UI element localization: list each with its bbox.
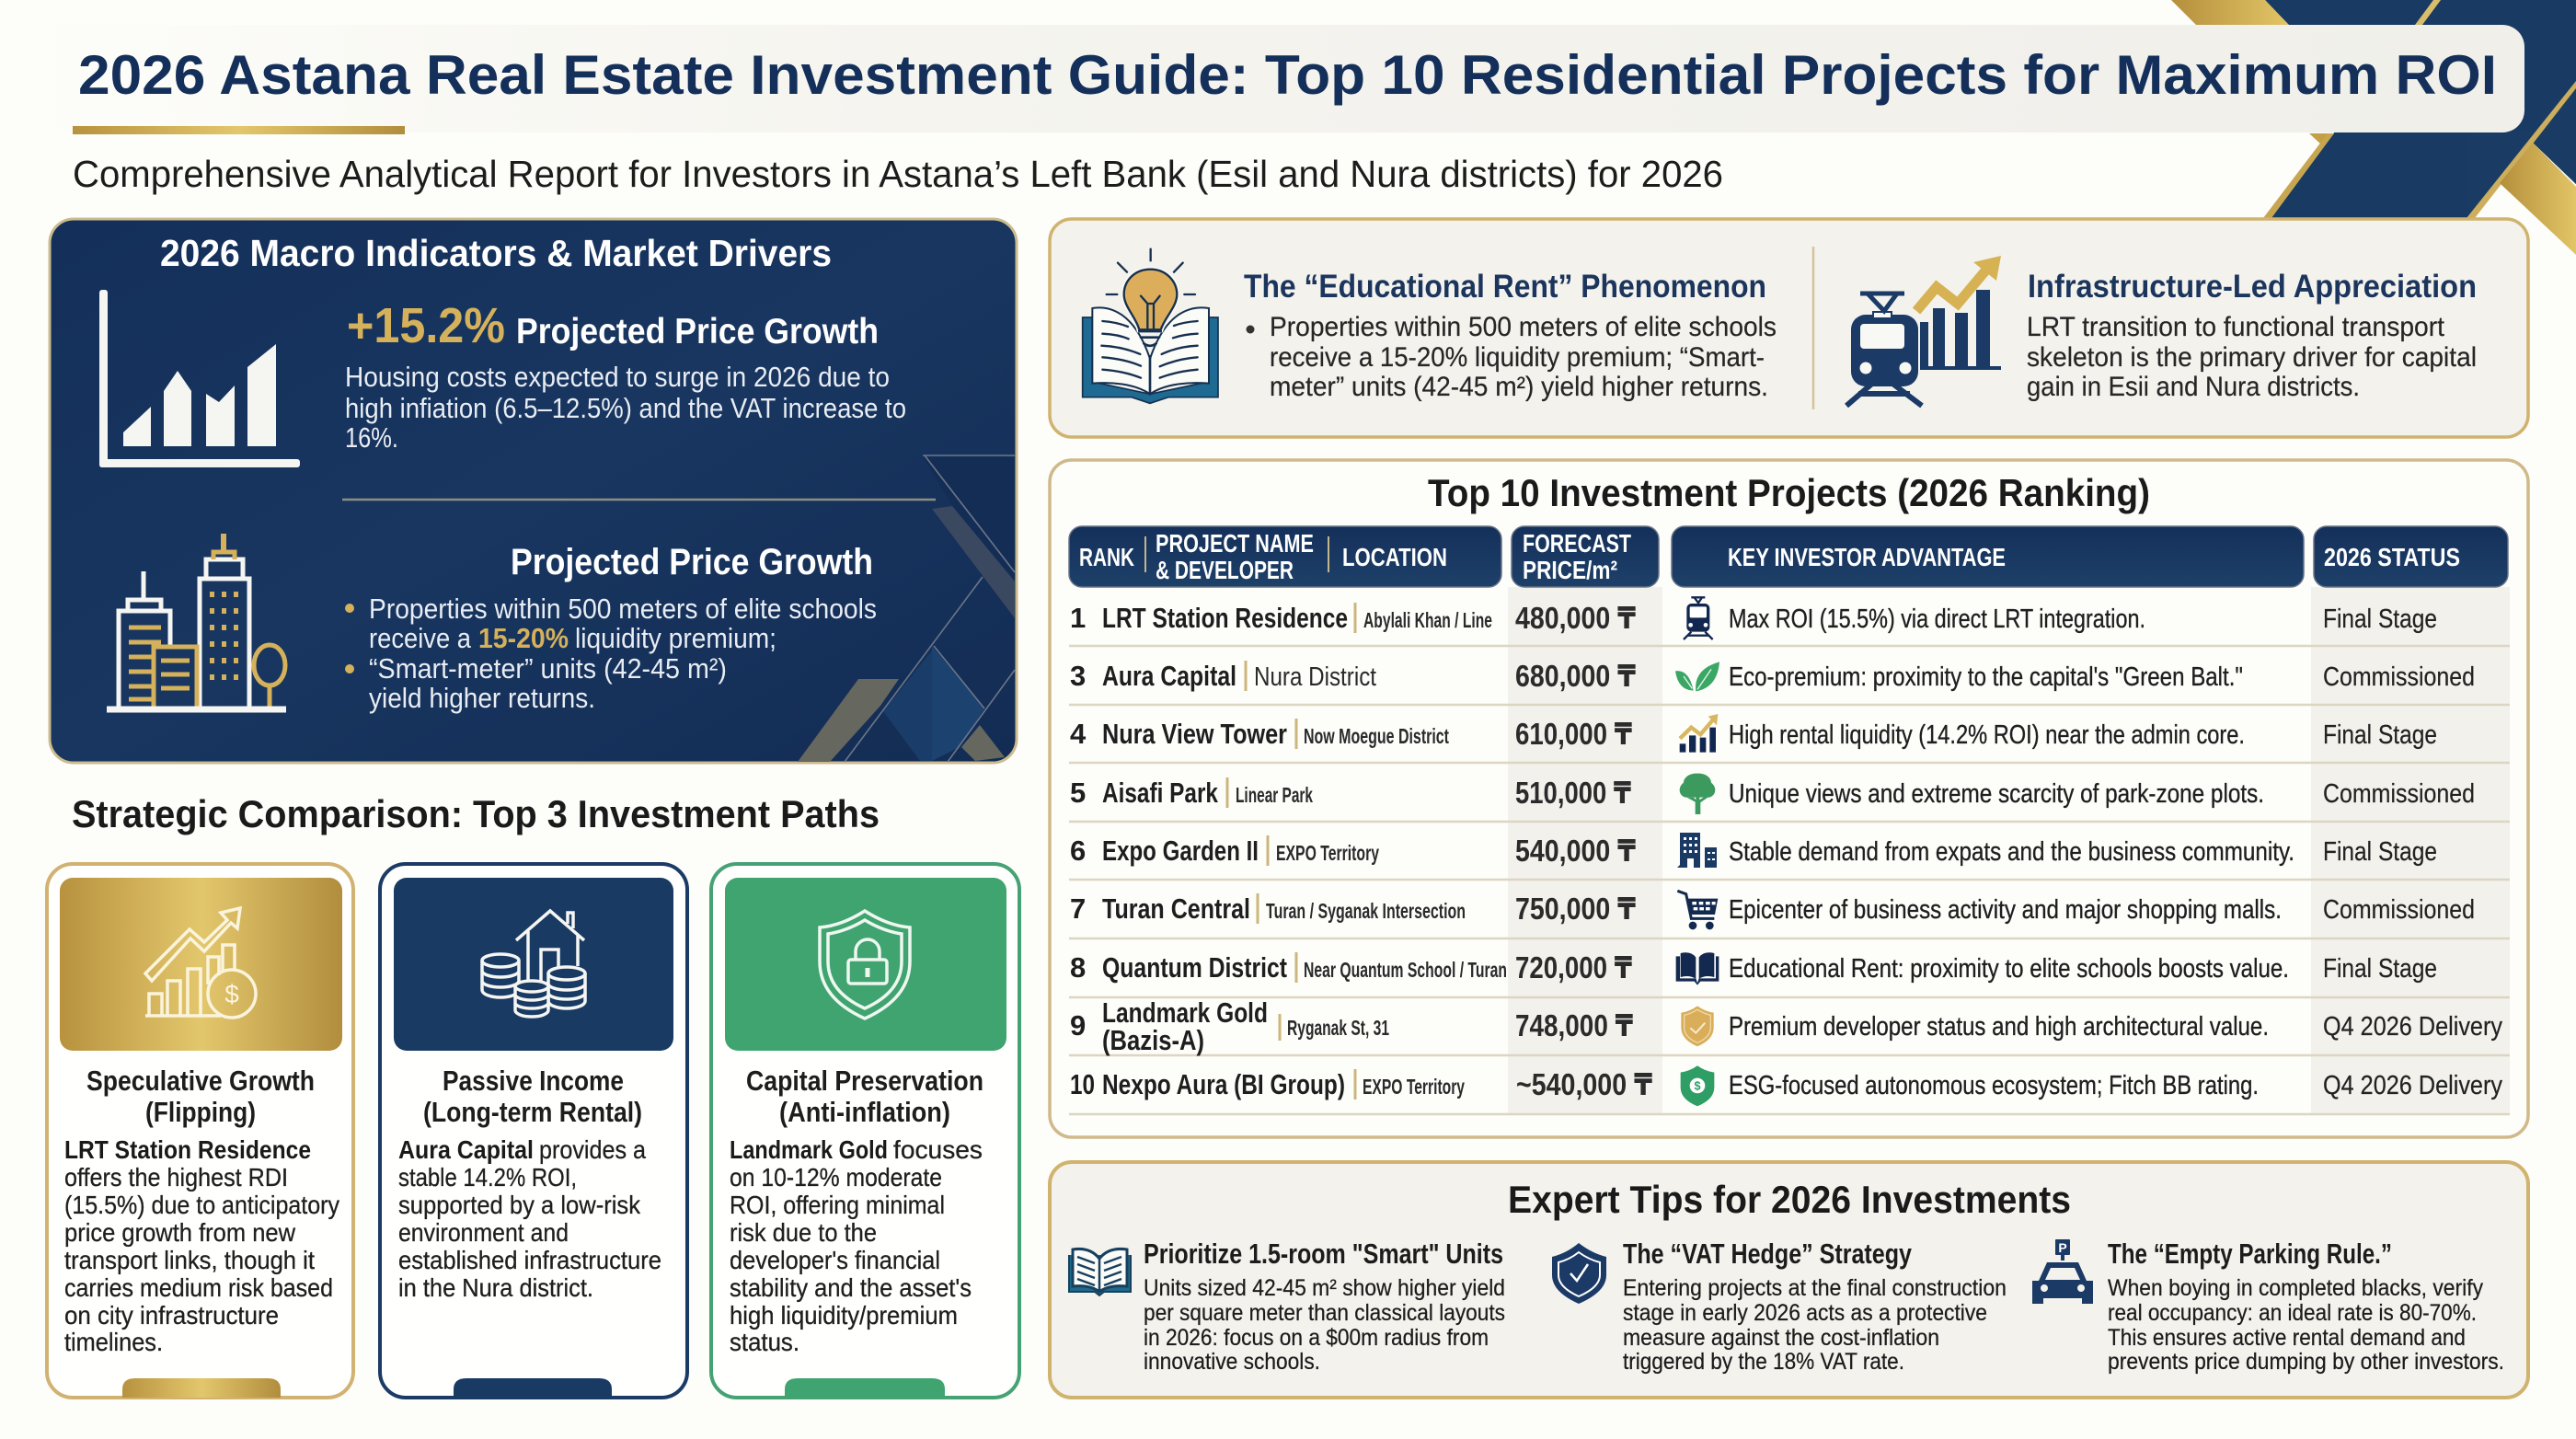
row: Quantum District: Final Stage	[2323, 954, 2437, 984]
row: Turan Central: 750,000 ₸	[1515, 892, 1636, 926]
row: Landmark Gold: 748,000 ₸	[1515, 1008, 1633, 1042]
row: Landmark Gold: (Bazis-A)	[1102, 1024, 1204, 1056]
row: Landmark Gold: Ryganak St, 31	[1287, 1016, 1389, 1040]
row: Turan Central: 7	[1070, 892, 1086, 925]
text: housing costs	[345, 361, 906, 454]
icon: rising chart	[1680, 714, 1718, 753]
bullets: schools and smart-meter units: 15-20%	[478, 622, 569, 654]
bullets: schools and smart-meter units: yield higher returns.	[369, 682, 595, 714]
card title: (Anti-inflation)	[779, 1096, 950, 1128]
row: Nura View Tower: High rental liquidity (14.2% ROI) near the admin core.	[1729, 720, 2245, 750]
text: housing costs: 16%.	[345, 421, 398, 454]
tip: parking rule: This ensures active rental demand and	[2108, 1325, 2466, 1351]
card text: on 10-12% moderate	[730, 1163, 942, 1191]
card tab	[785, 1378, 945, 1398]
row: Aura Capital: Eco-premium: proximity to the capital's "Green Balt."	[1729, 662, 2243, 692]
row: Turan Central: Epicenter of business activity and major shopping malls.	[1729, 895, 2282, 925]
card text: on city infrastructure	[64, 1301, 279, 1330]
table header: LOCATION	[1342, 543, 1447, 571]
icon: growth chart and coin	[145, 908, 256, 1018]
text: infrastructure	[2027, 312, 2477, 402]
row: Expo Garden II: 540,000 ₸	[1515, 834, 1636, 868]
tip: VAT hedge: The “VAT Hedge” Strategy	[1623, 1238, 1913, 1270]
table header: KEY INVESTOR ADVANTAGE	[1728, 543, 2006, 571]
icon: house and coins	[482, 911, 585, 1017]
card title: (Flipping)	[145, 1096, 256, 1128]
tip: VAT hedge: Entering projects at the final construction	[1623, 1275, 2007, 1301]
row: Aura Capital: Nura District	[1254, 662, 1376, 692]
bullets: schools and smart-meter units: “Smart-meter” units (42-45 m²)	[369, 652, 727, 685]
row: Quantum District: 720,000 ₸	[1515, 950, 1632, 984]
tip: parking rule: real occupancy: an ideal rate is 80-70%.	[2108, 1300, 2477, 1326]
card tab	[454, 1378, 612, 1398]
heading: educational rent: The “Educational Rent” Phenomenon	[1244, 269, 1766, 305]
bullets: schools and smart-meter units: Properties within 500 meters of elite schools	[369, 593, 877, 625]
table header: & DEVELOPER	[1156, 556, 1294, 584]
card text	[398, 1135, 661, 1302]
bullets: schools and smart-meter units: receive a	[369, 622, 472, 654]
card text: established infrastructure	[398, 1246, 661, 1274]
row: Aisafi Park: Unique views and extreme scarcity of park-zone plots.	[1729, 779, 2264, 809]
row: Aisafi Park: 5	[1070, 777, 1086, 809]
row: Expo Garden II: Final Stage	[2323, 837, 2437, 867]
row: Aura Capital	[1070, 659, 2475, 693]
icon: book	[1069, 1249, 1131, 1295]
text: infrastructure: skeleton is the primary driver for capital	[2027, 342, 2477, 373]
icon: parking car	[2032, 1239, 2093, 1304]
row: Aura Capital: Aura Capital	[1102, 660, 1236, 692]
row: Nexpo Aura: ESG-focused autonomous ecosystem; Fitch BB rating.	[1729, 1071, 2259, 1100]
row: LRT Station Residence: Max ROI (15.5%) via direct LRT integration.	[1729, 604, 2145, 634]
heading: infrastructure: Infrastructure-Led Appreciation	[2028, 269, 2477, 305]
row: Expo Garden II	[1070, 833, 2437, 868]
card text: developer's financial	[730, 1246, 940, 1274]
panel heading: 2026 Macro Indicators & Market Drivers	[160, 232, 832, 274]
card: speculative growth	[47, 864, 353, 1398]
row: Landmark Gold: 9	[1070, 1009, 1086, 1042]
row: Landmark Gold: Landmark Gold	[1102, 996, 1268, 1029]
icon: open book	[1676, 952, 1719, 985]
row: Nura View Tower: 4	[1070, 718, 1087, 750]
row: Nexpo Aura	[1070, 1065, 2502, 1106]
row: Turan Central: Commissioned	[2323, 895, 2475, 925]
row: Turan Central: Turan Central	[1102, 892, 1250, 925]
row: Nura View Tower: Now Moegue District	[1304, 724, 1449, 748]
card title	[423, 1065, 642, 1128]
text: infrastructure: LRT transition to functional transport	[2027, 312, 2445, 342]
table header: FORECAST	[1523, 529, 1631, 558]
card text: focuses	[893, 1135, 983, 1164]
row: Turan Central	[1070, 891, 2475, 929]
table header: RANK	[1079, 543, 1134, 571]
card text: timelines.	[64, 1328, 163, 1356]
icon: book with light bulb	[1083, 249, 1218, 403]
row: Nexpo Aura: 10	[1070, 1068, 1095, 1100]
row: Expo Garden II: EXPO Territory	[1276, 841, 1379, 865]
row: Quantum District: Near Quantum School / Turan	[1304, 958, 1507, 982]
table header: PRICE/m²	[1523, 556, 1617, 584]
row: Aura Capital: Commissioned	[2323, 662, 2475, 692]
card text: supported by a low-risk	[398, 1191, 641, 1219]
row: Nexpo Aura: Nexpo Aura (BI Group)	[1102, 1068, 1345, 1100]
card text: stable 14.2% ROI,	[398, 1163, 577, 1191]
icon: green shield: $	[1694, 1080, 1701, 1093]
tip: VAT hedge	[1623, 1238, 2007, 1375]
row: LRT Station Residence: Final Stage	[2323, 604, 2437, 634]
card text: stability and the asset's	[730, 1273, 972, 1302]
title panel	[28, 25, 2524, 132]
card text: transport links, though it	[64, 1246, 315, 1274]
card text: LRT Station Residence	[64, 1135, 311, 1164]
table header: PROJECT NAME	[1156, 529, 1314, 558]
row: Aura Capital: 3	[1070, 660, 1086, 692]
table header: 2026 STATUS	[2324, 543, 2460, 571]
row: LRT Station Residence: Abylali Khan / Line	[1363, 608, 1492, 632]
tip: smart units: in 2026: focus on a $00m radius from	[1144, 1325, 1489, 1351]
table row lines	[1069, 646, 2510, 1114]
card text: (15.5%) due to anticipatory	[64, 1191, 339, 1219]
row: Turan Central: Turan / Syganak Intersection	[1266, 899, 1466, 923]
row: Aisafi Park: Commissioned	[2323, 779, 2475, 809]
card title: (Long-term Rental)	[423, 1096, 642, 1128]
card: capital preservation	[711, 864, 1019, 1398]
row: Landmark Gold: Q4 2026 Delivery	[2323, 1012, 2502, 1042]
text: educational rent: meter” units (42-45 m²) yield higher returns.	[1270, 372, 1768, 402]
tips heading: Expert Tips for 2026 Investments	[1508, 1178, 2071, 1221]
row: Nexpo Aura: ~540,000 ₸	[1516, 1067, 1652, 1101]
icon: growth chart and coin: $	[224, 980, 239, 1008]
row: LRT Station Residence	[1070, 597, 2437, 639]
table header	[1069, 526, 2508, 587]
row: Expo Garden II: Expo Garden II	[1102, 835, 1259, 867]
row: Nura View Tower: Nura View Tower	[1102, 718, 1287, 750]
title: 2026 Astana Real Estate Investment Guide: Top 10 Residential Projects for Maximum ROI	[78, 44, 2497, 106]
row: LRT Station Residence: LRT Station Residence	[1102, 602, 1348, 634]
row: Aisafi Park	[1070, 774, 2475, 814]
row: Aisafi Park: Linear Park	[1236, 783, 1313, 807]
card text: high liquidity/premium	[730, 1301, 958, 1330]
card text: environment and	[398, 1218, 569, 1247]
row: Aisafi Park: 510,000 ₸	[1515, 776, 1631, 810]
tip: parking rule: prevents price dumping by other investors.	[2108, 1349, 2504, 1375]
icon: shield and lock	[820, 911, 910, 1019]
tip: smart units: Prioritize 1.5-room "Smart" Units	[1144, 1238, 1503, 1270]
table title: Top 10 Investment Projects (2026 Ranking)	[1428, 471, 2150, 514]
card text: Aura Capital	[398, 1135, 534, 1164]
heading: projected price growth: Projected Price Growth	[511, 542, 873, 582]
card text: Landmark Gold	[730, 1135, 888, 1164]
text: educational rent: receive a 15-20% liquidity premium; “Smart-	[1270, 342, 1765, 373]
bullets: schools and smart-meter units: liquidity premium;	[575, 622, 776, 654]
panel: expert tips	[1050, 1162, 2528, 1398]
card tab	[122, 1378, 281, 1398]
card: passive income	[380, 864, 687, 1398]
card text: offers the highest RDI	[64, 1163, 288, 1191]
icon: bar chart	[99, 290, 300, 467]
tip: smart units: Units sized 42-45 m² show higher yield	[1144, 1275, 1505, 1301]
card title: Speculative Growth	[86, 1065, 315, 1097]
card text: carries medium risk based	[64, 1273, 333, 1302]
tip: smart units: per square meter than classical layouts	[1144, 1300, 1505, 1326]
tip: smart units: innovative schools.	[1144, 1349, 1320, 1375]
card text: risk due to the	[730, 1218, 877, 1247]
panel: macro indicators	[50, 219, 1017, 763]
row: Nura View Tower: Final Stage	[2323, 720, 2437, 750]
panel: top 10 table	[1050, 460, 2528, 1137]
text: housing costs: Housing costs expected to surge in 2026 due to	[345, 361, 890, 393]
row: Expo Garden II: 6	[1070, 835, 1086, 867]
icon: train	[1684, 597, 1713, 639]
row: Nura View Tower: 610,000 ₸	[1515, 717, 1632, 751]
tip: parking rule: The “Empty Parking Rule.”	[2108, 1238, 2392, 1270]
row: Aisafi Park: Aisafi Park	[1102, 777, 1219, 809]
row: Nexpo Aura: Q4 2026 Delivery	[2323, 1071, 2502, 1100]
tip: VAT hedge: measure against the cost-inflation	[1623, 1325, 1939, 1351]
stat: price growth: +15.2%	[347, 298, 505, 353]
card text	[730, 1135, 983, 1356]
icon: green shield	[1681, 1065, 1714, 1106]
icon: parking car: P	[2058, 1240, 2067, 1255]
row: Nexpo Aura: EXPO Territory	[1363, 1075, 1465, 1099]
icon: shield	[1552, 1243, 1606, 1304]
table column shading	[1508, 587, 2510, 1114]
icon: gold shield	[1681, 1006, 1714, 1046]
card text	[64, 1135, 339, 1356]
panel: insights	[1050, 219, 2528, 437]
tip: parking rule	[2108, 1238, 2504, 1375]
heading: strategic comparison: Strategic Comparison: Top 3 Investment Paths	[72, 792, 880, 835]
card title: Capital Preservation	[746, 1065, 983, 1097]
card text: status.	[730, 1328, 799, 1356]
row: Landmark Gold	[1070, 996, 2502, 1056]
icon: shopping cart	[1677, 891, 1718, 929]
stat: price growth: Projected Price Growth	[516, 312, 879, 351]
row: Quantum District: Educational Rent: proximity to elite schools boosts value.	[1729, 954, 2289, 984]
card text: ROI, offering minimal	[730, 1191, 945, 1219]
card text: in the Nura district.	[398, 1273, 593, 1302]
decorative corner: navy and gold bands	[2171, 0, 2576, 255]
row: Nura View Tower	[1070, 714, 2437, 753]
tip: VAT hedge: triggered by the 18% VAT rate.	[1623, 1349, 1904, 1375]
subtitle: Comprehensive Analytical Report for Investors in Astana’s Left Bank (Esil and Nura districts) for 2026	[73, 153, 1723, 195]
card title: Passive Income	[443, 1065, 624, 1097]
row: Quantum District: 8	[1070, 951, 1086, 984]
row: LRT Station Residence: 1	[1070, 602, 1086, 634]
row: LRT Station Residence: 480,000 ₸	[1515, 601, 1636, 635]
text: infrastructure: gain in Esii and Nura districts.	[2027, 372, 2360, 402]
card title	[86, 1065, 315, 1128]
row: Landmark Gold: Premium developer status and high architectural value.	[1729, 1012, 2269, 1042]
row: Expo Garden II: Stable demand from expats and the business community.	[1729, 837, 2294, 867]
tip: VAT hedge: stage in early 2026 acts as a protective	[1623, 1300, 1987, 1326]
text: educational rent: Properties within 500 meters of elite schools	[1270, 312, 1777, 342]
tip: smart units	[1144, 1238, 1505, 1375]
row: Aura Capital: 680,000 ₸	[1515, 659, 1636, 693]
text: housing costs: high infiation (6.5–12.5%) and the VAT increase to	[345, 392, 906, 424]
bullets: schools and smart-meter units	[345, 593, 877, 714]
icon: tree	[1680, 774, 1715, 814]
icon: leaves	[1675, 662, 1719, 691]
row: Quantum District	[1070, 950, 2437, 985]
card text: provides a	[539, 1135, 646, 1164]
card text: price growth from new	[64, 1218, 296, 1247]
icon: city skyline	[107, 534, 286, 709]
panel decoration	[798, 455, 1015, 762]
stat: price growth	[347, 298, 879, 353]
row: Quantum District: Quantum District	[1102, 951, 1287, 984]
icon: office buildings	[1677, 833, 1717, 868]
icon: train and rising chart	[1846, 256, 2001, 406]
tip: parking rule: When boying in completed blacks, verify	[2108, 1275, 2483, 1301]
text: educational rent	[1246, 312, 1777, 402]
card title	[746, 1065, 983, 1128]
gold underline	[73, 126, 405, 134]
